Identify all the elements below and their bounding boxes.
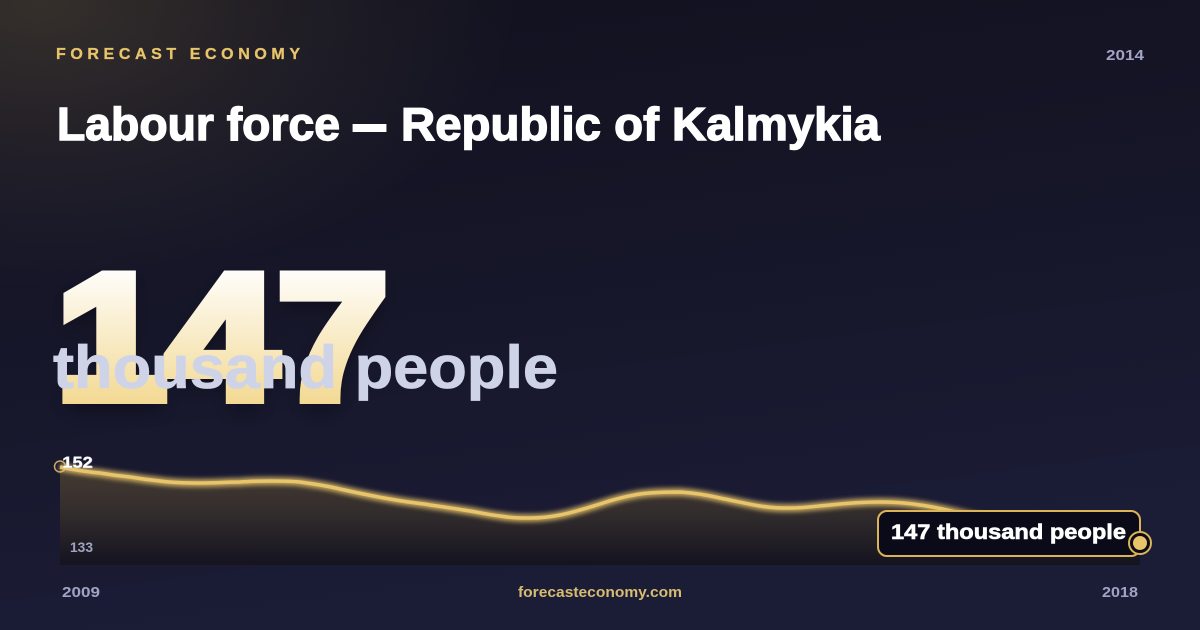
max value label: 152 <box>62 454 93 472</box>
end marker <box>1129 532 1151 554</box>
callout <box>878 511 1140 556</box>
sparkline chart <box>54 454 1151 565</box>
footer source: forecasteconomy.com <box>518 585 682 601</box>
x axis start year: 2009 <box>62 584 100 601</box>
title: Republic of Kalmykia <box>401 98 880 150</box>
title: — <box>355 110 384 143</box>
callout: 147 thousand people <box>891 521 1126 544</box>
unit label: thousand people <box>53 334 558 401</box>
title: Labour force <box>57 98 340 150</box>
big number: 147 <box>56 238 388 436</box>
big number: 147 <box>56 247 388 446</box>
title <box>57 98 880 150</box>
x axis end year: 2018 <box>1102 584 1138 601</box>
year label: 2014 <box>1106 47 1145 64</box>
start marker <box>54 461 66 472</box>
eyebrow: brand label: FORECAST ECONOMY <box>56 46 300 63</box>
data line <box>60 467 1140 543</box>
max value label: 152 <box>62 455 93 472</box>
chart area fill <box>60 467 1140 565</box>
min value label: 133 <box>70 539 93 555</box>
line glow <box>60 467 1140 543</box>
